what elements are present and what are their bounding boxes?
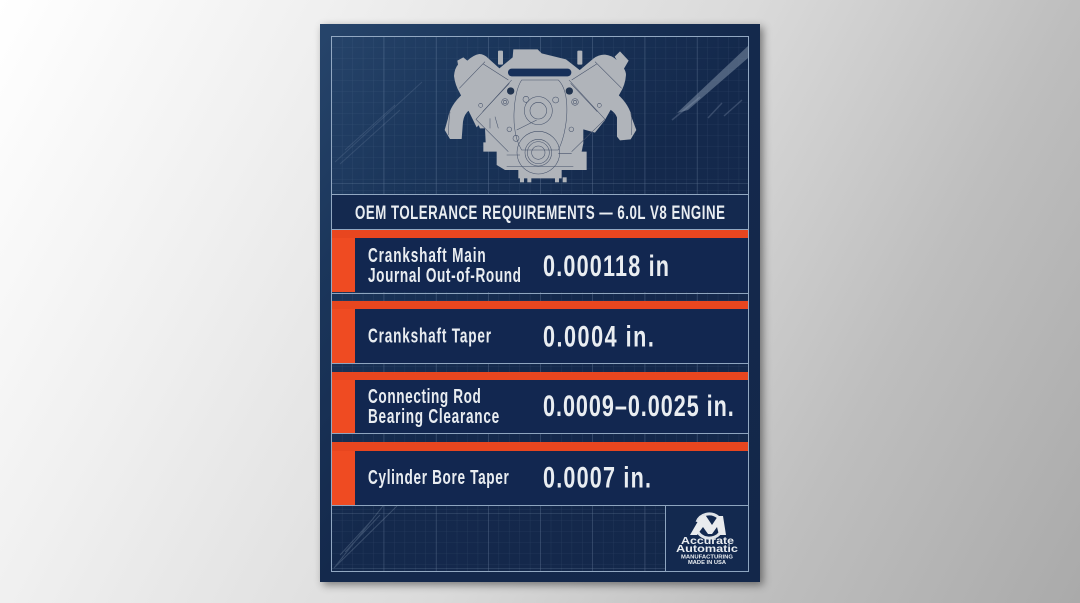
label: crankshaft main journal out-of-round: Crankshaft Main: [368, 244, 486, 267]
icon: pencil sketch top left: [335, 82, 422, 164]
panel: row 2 crankshaft taper: [332, 301, 748, 364]
value: 0.0007 in.: 0.0007 in.: [543, 460, 651, 494]
panel: logo box: [666, 506, 748, 572]
panel: blueprint poster: [320, 24, 760, 582]
title: OEM TOLERANCE REQUIREMENTS — 6.0L V8 ENGINE: [355, 201, 725, 224]
label: cylinder bore taper: Cylinder Bore Taper: [368, 466, 509, 489]
label: connecting rod bearing clearance: [368, 385, 499, 428]
value: 0.0009–0.0025 in.: 0.0009–0.0025 in.: [543, 388, 734, 423]
label: crankshaft taper: Crankshaft Taper: [368, 325, 491, 347]
text: company name: Accurate: [681, 536, 735, 547]
panel: row 4 cylinder bore taper: [332, 442, 748, 506]
label: crankshaft main journal out-of-round: Journal Out-of-Round: [368, 264, 521, 287]
text: company name: MADE IN USA: [688, 560, 726, 566]
panel: row 3 connecting rod: [332, 372, 748, 434]
label: connecting rod bearing clearance: Bearing Clearance: [368, 405, 499, 428]
value: 0.0004 in.: 0.0004 in.: [543, 319, 654, 353]
text: company name: MANUFACTURING: [681, 554, 733, 560]
text: company name: Automatic: [676, 544, 739, 555]
label: crankshaft main journal out-of-round: [368, 244, 521, 287]
icon: V8 engine front view: [445, 49, 636, 182]
panel: row 1 crankshaft main journal: [332, 230, 748, 294]
icon: pencil sketch bottom left: [334, 506, 397, 568]
icon: pencil sketch top right: [672, 46, 748, 120]
icon: AM logo mark: [690, 514, 726, 538]
title band: [332, 194, 748, 230]
label: connecting rod bearing clearance: Connecting Rod: [368, 385, 481, 408]
text: company name: [676, 536, 739, 566]
value: 0.000118 in: 0.000118 in: [543, 248, 669, 283]
